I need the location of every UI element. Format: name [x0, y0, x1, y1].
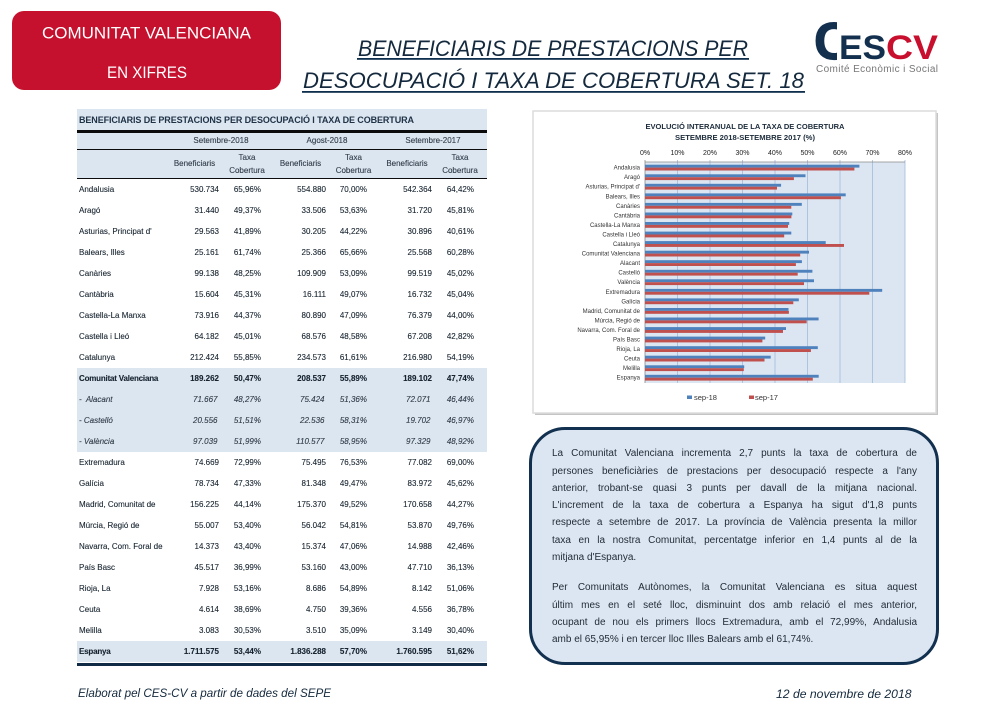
- row: Balears: 60,28%: [447, 248, 474, 256]
- row: Balears: 25.366: [302, 248, 326, 256]
- row: Canàries: 53,09%: [340, 268, 367, 278]
- Cantàbria bars: Cantàbria: [614, 213, 641, 219]
- row: Galícia: 81.348: [302, 478, 326, 488]
- row: Ceuta: 4.556: [412, 604, 432, 614]
- row: Ceuta: 4.614: [199, 604, 219, 614]
- row: Galícia: 49,47%: [340, 478, 367, 488]
- Alacant bars: Alacant: [620, 261, 640, 267]
- row: Aragó: 49,37%: [234, 206, 261, 214]
- row: València: 51,99%: [234, 436, 261, 446]
- row: València: [77, 431, 487, 452]
- row: Cantàbria: 16.111: [303, 290, 326, 298]
- row: Navarra: 14.988: [408, 542, 432, 550]
- row: Madrid: [79, 500, 474, 508]
- Castella-La Manxa bars: Castella-La Manxa: [590, 223, 641, 229]
- row: Comunitat Valenciana: Comunitat Valenciana: [79, 374, 158, 382]
- row: Espanya: [77, 641, 487, 662]
- row: Comunitat Valenciana: 208.537: [297, 374, 326, 382]
- commentary box: persones beneficiàries de prestacions per desocupació respecte a l'any: [552, 466, 917, 477]
- footer: source: Elaborat pel CES-CV a partir de dades del SEPE: [78, 687, 331, 700]
- title: BENEFICIARIS DE PRESTACIONS PER: [358, 36, 748, 61]
- x axis labels: 70%: [865, 150, 880, 157]
- row: Rioja: 7.928: [199, 584, 219, 592]
- row: Espanya: Espanya: [79, 646, 111, 656]
- column headers: Beneficiaris: [174, 159, 215, 168]
- row: Castelló: - Castelló: [79, 416, 113, 424]
- row: Melilla: 3.510: [306, 626, 326, 634]
- Catalunya bars: Catalunya: [613, 242, 641, 248]
- row: Alacant: 71.667: [193, 394, 218, 404]
- row: Comunitat Valenciana: 189.102: [403, 374, 432, 382]
- logo: CES-CV: Comité Econòmic i Social: [816, 64, 938, 75]
- legend: sep-17: [755, 393, 778, 402]
- title: DESOCUPACIÓ I TAXA DE COBERTURA SET. 18: [303, 68, 805, 93]
- row: Castella i Lleó: 45,01%: [234, 332, 261, 340]
- column headers: Taxa: [239, 153, 255, 162]
- row: Melilla: 30,53%: [234, 626, 261, 634]
- period headers: Agost-2018: [307, 136, 347, 145]
- row: Navarra: Navarra, Com. Foral de: [79, 542, 163, 550]
- row: Catalunya: 54,19%: [447, 352, 474, 362]
- row: Madrid: 44,27%: [447, 500, 474, 508]
- row: Ceuta: 4.750: [306, 604, 326, 614]
- row: Extremadura: 72,99%: [234, 458, 261, 466]
- row: Andalusia: 554.880: [297, 184, 326, 194]
- row: Espanya: 1.711.575: [184, 646, 219, 656]
- row: Múrcia: 55.007: [195, 520, 219, 530]
- row: Aragó: 53,63%: [340, 206, 367, 214]
- column headers: Cobertura: [442, 166, 478, 175]
- row: Asturias: Asturias, Principat d': [79, 226, 152, 236]
- row: Andalusia: [79, 184, 474, 194]
- row: Múrcia: 49,76%: [447, 520, 474, 530]
- row: Espanya: 1.760.595: [396, 646, 432, 656]
- column headers: Cobertura: [229, 166, 265, 175]
- row: Comunitat Valenciana: 47,74%: [447, 374, 474, 382]
- commentary box: La Comunitat Valenciana incrementa 2,7 punts la taxa de cobertura de: [552, 448, 917, 459]
- row: Madrid: 44,14%: [234, 500, 261, 508]
- commentary box: respecte a setembre de 2017. La província de València presenta la millor: [552, 517, 917, 528]
- row: País Basc: 45.517: [195, 562, 219, 572]
- row: Castella-La Manxa: 44,37%: [234, 310, 261, 320]
- row: Andalusia: Andalusia: [79, 184, 114, 194]
- commentary box: últim mes en el seté lloc, disminuint dos amb relació el mes anterior,: [552, 600, 917, 611]
- row: Ceuta: [79, 604, 474, 614]
- row: País Basc: País Basc: [79, 562, 115, 572]
- row: Melilla: 3.083: [199, 626, 219, 634]
- row: Galícia: 78.734: [195, 478, 219, 488]
- row: Extremadura: 75.495: [302, 458, 326, 466]
- row: Múrcia: 54,81%: [340, 520, 367, 530]
- row: Castelló: 22.536: [300, 416, 324, 424]
- row: Aragó: 45,81%: [447, 206, 474, 214]
- row: Catalunya: [79, 352, 474, 362]
- row: Balears: 65,66%: [340, 248, 367, 256]
- row: Castella i Lleó: 48,58%: [340, 332, 367, 340]
- row: Melilla: 30,40%: [447, 626, 474, 634]
- row: Catalunya: 234.573: [297, 352, 326, 362]
- row: Rioja: 51,06%: [447, 584, 474, 592]
- row: Aragó: 31.720: [408, 206, 432, 214]
- row: Rioja: 8.142: [412, 584, 432, 592]
- row: País Basc: 43,00%: [340, 562, 367, 572]
- badge: Comunitat Valenciana en xifres: [12, 11, 281, 90]
- row: Extremadura: Extremadura: [79, 458, 125, 466]
- column headers: Cobertura: [336, 166, 371, 175]
- Extremadura bars: Extremadura: [606, 290, 641, 296]
- row: Castelló: 46,97%: [447, 416, 474, 424]
- Múrcia bars: Múrcia, Regió de: [595, 318, 641, 324]
- Aragó bars: Aragó: [624, 175, 641, 181]
- Navarra bars: Navarra, Com. Foral de: [577, 328, 641, 334]
- row: Madrid: Madrid, Comunitat de: [79, 500, 155, 508]
- row: Rioja: 53,16%: [234, 584, 261, 592]
- logo: CES-CV: ES: [839, 29, 886, 67]
- bars and labels by territory: [577, 165, 882, 382]
- row: Balears: [79, 248, 474, 256]
- commentary box: amb el 65,95% i en tercer lloc Illes Balears amb el 61,74%.: [552, 634, 813, 645]
- row: Comunitat Valenciana: 55,89%: [340, 374, 367, 382]
- legend: [687, 393, 778, 402]
- chart panel: evolució interanual: [532, 110, 938, 415]
- row: València: 58,95%: [340, 436, 367, 446]
- row: Balears: 25.568: [408, 248, 432, 256]
- row: País Basc: [79, 562, 474, 572]
- badge: Comunitat Valenciana en xifres: EN XIFRES: [107, 64, 187, 82]
- row: Catalunya: 55,85%: [234, 352, 261, 362]
- badge: Comunitat Valenciana en xifres: COMUNITAT VALENCIANA: [42, 24, 251, 42]
- x axis labels: 40%: [768, 150, 782, 157]
- row: Galícia: Galícia: [79, 478, 104, 488]
- row: Ceuta: 39,36%: [340, 604, 367, 614]
- row: Navarra: 42,46%: [447, 542, 474, 550]
- row: Castella-La Manxa: 76.379: [408, 310, 432, 320]
- row: Navarra: 14.373: [195, 542, 219, 550]
- row: Galícia: 47,33%: [234, 478, 261, 488]
- row: València: 110.577: [296, 436, 324, 446]
- row: Múrcia: [79, 520, 474, 530]
- row: Castella-La Manxa: 47,09%: [340, 310, 367, 320]
- row: Ceuta: Ceuta: [79, 604, 100, 614]
- row: Rioja: 8.686: [306, 584, 326, 592]
- row: Melilla: [79, 626, 474, 634]
- row: Castella-La Manxa: [79, 310, 474, 320]
- row: Extremadura: 69,00%: [447, 458, 474, 466]
- commentary box: ocupant de nou els primers llocs Extremadura, amb el 72,99%, Andalusia: [552, 617, 917, 628]
- row: Extremadura: 74.669: [195, 458, 219, 466]
- commentary box: Per Comunitats Autònomes, la Comunitat Valenciana es situa aquest: [552, 582, 917, 593]
- row: Múrcia: 56.042: [302, 520, 326, 530]
- row: Castella-La Manxa: 80.890: [302, 310, 326, 320]
- row: Castella i Lleó: [79, 332, 474, 340]
- row: País Basc: 36,99%: [234, 562, 261, 572]
- table header background: [77, 109, 487, 178]
- x axis labels: 10%: [670, 150, 685, 157]
- row: Navarra: 47,06%: [340, 542, 367, 550]
- row: Extremadura: [79, 458, 474, 466]
- row: Castelló: 19.702: [406, 416, 430, 424]
- row: Andalusia: 64,42%: [447, 184, 474, 194]
- row: Castelló: [77, 410, 487, 431]
- Melilla bars: [623, 365, 744, 372]
- row: Andalusia: 70,00%: [340, 184, 367, 194]
- row: Asturias: 30.896: [408, 226, 432, 236]
- row: Madrid: 49,52%: [340, 500, 367, 508]
- table heading: BENEFICIARIS DE PRESTACIONS PER DESOCUPACIÓ I TAXA DE COBERTURA: [79, 114, 414, 124]
- row: Balears: 25.161: [195, 248, 219, 256]
- Andalusia bars: Andalusia: [614, 166, 641, 172]
- Castella i Lleó bars: Castella i Lleó: [602, 232, 641, 238]
- x axis labels: 0%: [640, 150, 650, 157]
- row: Canàries: 99.138: [195, 268, 219, 278]
- footer: date: 12 de novembre de 2018: [776, 687, 912, 701]
- row: Madrid: 170.658: [403, 500, 432, 508]
- row: Rioja: 54,89%: [340, 584, 367, 592]
- table: beneficiaris i taxa de cobertura: [77, 114, 487, 662]
- Comunitat Valenciana bars: Comunitat Valenciana: [582, 252, 641, 258]
- row: Asturias: 29.563: [195, 226, 219, 236]
- row: Melilla: Melilla: [79, 626, 102, 634]
- row: Alacant: 46,44%: [447, 394, 474, 404]
- row: Balears: 61,74%: [234, 248, 261, 256]
- row: Ceuta: 38,69%: [234, 604, 261, 614]
- period headers: [193, 136, 461, 145]
- row: Alacant: 72.071: [406, 394, 430, 404]
- row: Catalunya: 61,61%: [340, 352, 367, 362]
- row: València: 48,92%: [447, 436, 474, 446]
- Rioja bars: Rioja, La: [616, 347, 641, 353]
- row: Extremadura: 76,53%: [340, 458, 367, 466]
- row: Cantàbria: 15.604: [195, 290, 219, 298]
- row: Castelló: 20.556: [193, 416, 218, 424]
- Castelló bars: Castelló: [618, 271, 641, 277]
- row: Canàries: Canàries: [79, 268, 111, 278]
- row: Alacant: [77, 389, 487, 410]
- Canàries bars: Canàries: [616, 204, 640, 210]
- row: Alacant: - Alacant: [79, 394, 112, 404]
- column headers: Taxa: [452, 153, 468, 162]
- row: Catalunya: Catalunya: [79, 352, 115, 362]
- column headers: Beneficiaris: [386, 159, 428, 168]
- row: València: - València: [79, 436, 114, 446]
- row: Comunitat Valenciana: [77, 368, 487, 389]
- row: Navarra: [79, 542, 474, 550]
- row: Castella-La Manxa: 73.916: [195, 310, 219, 320]
- row: Galícia: [79, 478, 474, 488]
- row: Catalunya: 216.980: [403, 352, 432, 362]
- row: Cantàbria: 16.732: [408, 290, 432, 298]
- title: [302, 36, 805, 93]
- row: Extremadura: 77.082: [408, 458, 432, 466]
- logo: CES-CV: [816, 22, 938, 75]
- row: Rioja: [79, 584, 474, 592]
- row: Asturias: 30.205: [302, 226, 326, 236]
- row: Navarra: 15.374: [302, 542, 326, 550]
- row: Castella i Lleó: Castella i Lleó: [79, 332, 129, 340]
- chart title: EVOLUCIÓ INTERANUAL DE LA TAXA DE COBERTURA: [646, 122, 845, 131]
- row: País Basc: 47.710: [408, 562, 432, 572]
- row: Aragó: [79, 206, 474, 214]
- chart title: SETEMBRE 2018-SETEMBRE 2017 (%): [675, 133, 816, 142]
- x axis labels: 60%: [833, 150, 847, 157]
- row: Galícia: 45,62%: [447, 478, 474, 488]
- row: Múrcia: 53.870: [408, 520, 432, 530]
- row: Melilla: 35,09%: [340, 626, 367, 634]
- row: Múrcia: Múrcia, Regió de: [79, 520, 139, 530]
- row: Aragó: 33.506: [302, 206, 326, 214]
- row: Castella i Lleó: 64.182: [195, 332, 219, 340]
- x axis labels: [640, 150, 912, 157]
- row: Cantàbria: 45,31%: [234, 290, 261, 298]
- row: País Basc: 36,13%: [447, 562, 474, 572]
- row: Castelló: 58,31%: [340, 416, 367, 424]
- row: Castella-La Manxa: 44,00%: [447, 310, 474, 320]
- row: Asturias: 44,22%: [340, 226, 367, 236]
- Melilla bars: Melilla: [623, 366, 641, 372]
- row: Canàries: 45,02%: [447, 268, 474, 278]
- row: Castella i Lleó: 68.576: [302, 332, 326, 340]
- row: Espanya: 1.836.288: [290, 646, 326, 656]
- row: Rioja: Rioja, La: [79, 584, 111, 592]
- row: Espanya: 57,70%: [340, 646, 367, 656]
- Asturias bars: Asturias, Principat d': [585, 185, 640, 191]
- period headers: Setembre-2017: [405, 136, 461, 145]
- row: Espanya: 51,62%: [447, 646, 474, 656]
- row: Castella i Lleó: 42,82%: [447, 332, 474, 340]
- row: Castella-La Manxa: Castella-La Manxa: [79, 310, 146, 320]
- logo: CES-CV: CV: [886, 29, 938, 67]
- row: Castelló: 51,51%: [234, 416, 261, 424]
- row: Madrid: 175.370: [297, 500, 326, 508]
- Espanya bars: Espanya: [617, 376, 641, 382]
- row: Aragó: Aragó: [79, 206, 100, 214]
- row: Aragó: 31.440: [195, 206, 219, 214]
- row: València: 97.329: [406, 436, 430, 446]
- x axis labels: 50%: [800, 150, 815, 157]
- row: Canàries: 99.519: [408, 268, 432, 278]
- commentary box: taxa en la nostra Comunitat, percentatge inferior en 1,4 punts al de la: [552, 535, 917, 546]
- table heading: [77, 114, 487, 662]
- row: País Basc: 53.160: [302, 562, 326, 572]
- row: Comunitat Valenciana: 50,47%: [234, 374, 261, 382]
- row: Andalusia: 530.734: [190, 184, 219, 194]
- row: Andalusia: 542.364: [403, 184, 432, 194]
- row: Andalusia: 65,96%: [234, 184, 261, 194]
- row: Asturias: [79, 226, 474, 236]
- València bars: València: [617, 280, 641, 286]
- chart title: [646, 122, 845, 142]
- plot area: [645, 160, 905, 383]
- commentary box: L'increment de la taxa de cobertura a Espanya ha sigut d'1,8 punts: [552, 500, 917, 511]
- row: Navarra: 43,40%: [234, 542, 261, 550]
- Balears bars: Balears, Illes: [606, 194, 640, 200]
- row: Asturias: 41,89%: [234, 226, 261, 236]
- row: Cantàbria: 45,04%: [447, 290, 474, 298]
- Madrid bars: Madrid, Comunitat de: [583, 309, 641, 315]
- row: Canàries: [79, 268, 474, 278]
- row: Espanya: 53,44%: [234, 646, 261, 656]
- row: Catalunya: 212.424: [190, 352, 219, 362]
- row: Alacant: 48,27%: [234, 394, 261, 404]
- x axis labels: 30%: [735, 150, 750, 157]
- row: Alacant: 51,36%: [340, 394, 367, 404]
- País Basc bars: País Basc: [613, 338, 640, 344]
- row: Canàries: 109.909: [297, 268, 326, 278]
- row: Asturias: 40,61%: [447, 226, 474, 236]
- row: Comunitat Valenciana: 189.262: [190, 374, 219, 382]
- Ceuta bars: Ceuta: [624, 357, 641, 363]
- column headers: Beneficiaris: [280, 159, 321, 168]
- row: Canàries: 48,25%: [234, 268, 261, 278]
- x axis labels: 20%: [703, 150, 717, 157]
- row: Múrcia: 53,40%: [234, 520, 261, 530]
- row: Galícia: 83.972: [408, 478, 432, 488]
- row: Castella i Lleó: 67.208: [408, 332, 432, 340]
- row: Cantàbria: [79, 290, 474, 298]
- row: Madrid: 156.225: [190, 500, 219, 508]
- row: Cantàbria: Cantàbria: [79, 290, 114, 298]
- row: Ceuta: 36,78%: [447, 604, 474, 614]
- commentary box: anterior, trobant-se quasi 3 punts per davall de la mitjana nacional.: [552, 483, 917, 494]
- row: Melilla: 3.149: [412, 626, 432, 634]
- period headers: Setembre-2018: [193, 136, 249, 145]
- x axis labels: 80%: [898, 150, 912, 157]
- row: Alacant: 75.424: [300, 394, 324, 404]
- row: València: 97.039: [193, 436, 218, 446]
- column headers: [174, 153, 478, 175]
- commentary box: mitjana d'Espanya.: [552, 552, 636, 563]
- Galícia bars: Galícia: [621, 299, 641, 305]
- legend: sep-18: [694, 393, 717, 402]
- row: Cantàbria: 49,07%: [340, 290, 367, 298]
- row: Balears: Balears, Illes: [79, 248, 125, 256]
- column headers: Taxa: [345, 153, 362, 162]
